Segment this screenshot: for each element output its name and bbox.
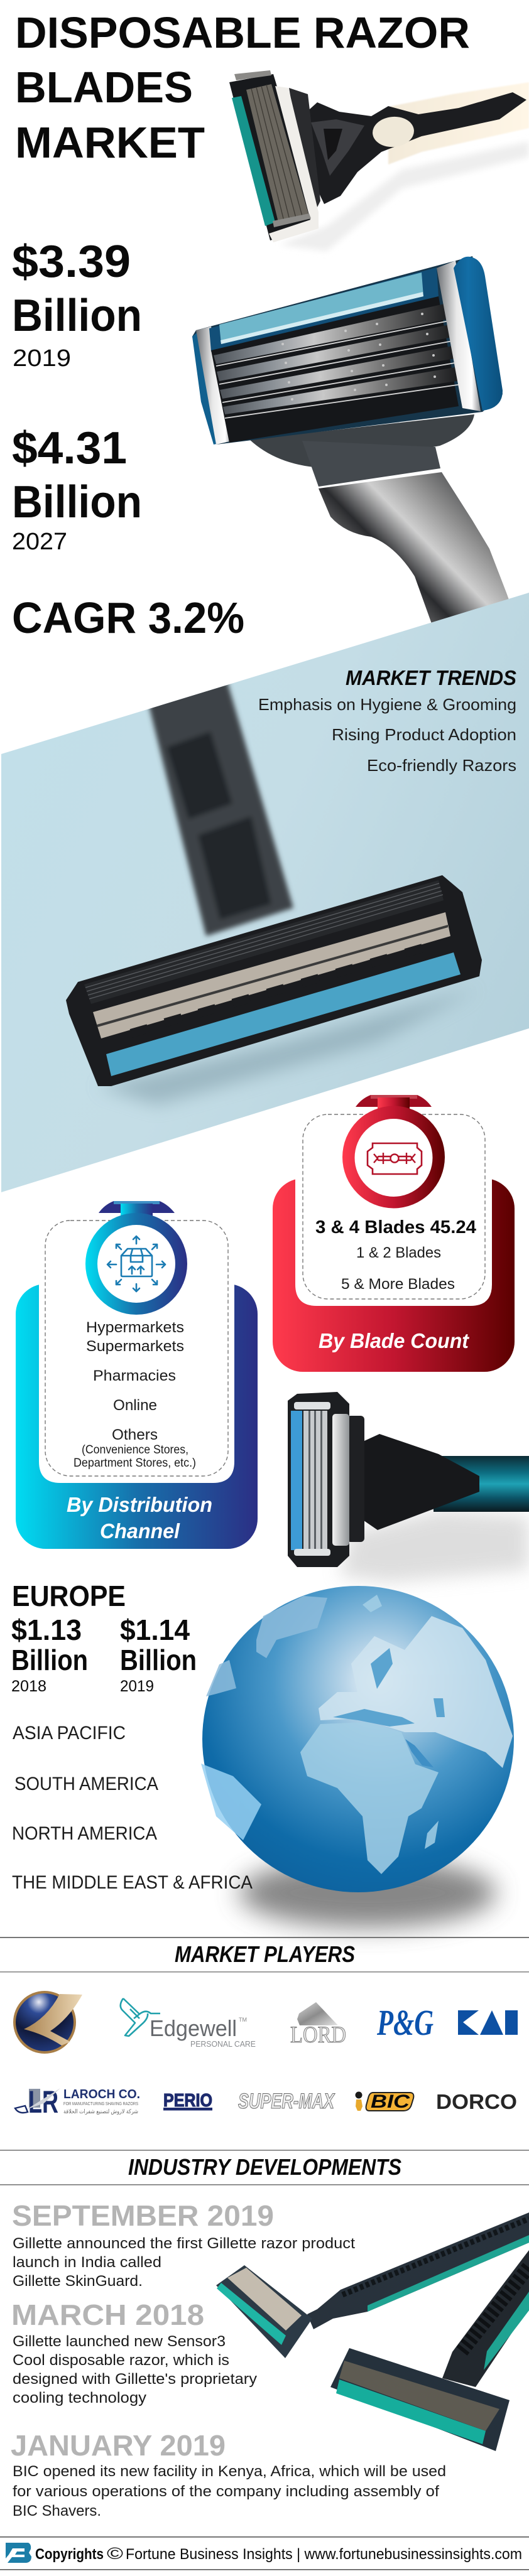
development: March 2018: Gillette launched new Sensor3	[13, 2333, 226, 2350]
development: September 2019: Gillette announced the first Gillette razor product	[13, 2235, 355, 2252]
trend list: Rising Product Adoption	[332, 725, 516, 744]
distribution channel list: Supermarkets	[86, 1338, 184, 1355]
footer	[0, 2536, 529, 2570]
region: Europe stats: 2019	[120, 1678, 154, 1695]
development: March 2018: cooling technology	[13, 2390, 146, 2406]
stat: 2019 market size: 2019	[13, 345, 71, 372]
region: Europe stats: $1.14	[120, 1614, 190, 1646]
development: March 2018	[11, 2298, 257, 2406]
photo: two disposable razors	[216, 2212, 529, 2451]
logo: BIC	[356, 2091, 413, 2112]
region list	[12, 1723, 253, 1893]
logo: Laroch Co.: FOR MANUFACTURING SHAVING RAZORS	[63, 2102, 138, 2106]
illustration: large blue razor	[192, 256, 521, 634]
panel: by distribution channel	[16, 1201, 258, 1549]
icon: Fortune Business Insights logo	[6, 2543, 31, 2563]
distribution channel list: Others	[112, 1426, 158, 1443]
development: September 2019: launch in India called	[13, 2254, 161, 2271]
stat: CAGR: CAGR 3.2%	[12, 593, 244, 642]
distribution channel label: By Distribution	[67, 1493, 212, 1516]
distribution channel list: Pharmacies	[93, 1367, 176, 1384]
title: DISPOSABLE RAZOR	[15, 8, 470, 57]
razor cartridge	[66, 875, 482, 1086]
seas over the land	[333, 1648, 445, 1767]
upper razor	[216, 2212, 529, 2358]
development: January 2019: BIC Shavers.	[13, 2503, 101, 2519]
development: September 2019: Gillette SkinGuard.	[13, 2273, 143, 2290]
footer: Copyrights	[35, 2546, 104, 2563]
logo: Laroch Co.: LAROCH CO.	[63, 2088, 140, 2101]
region: Europe stats: Billion	[120, 1644, 197, 1676]
development: January 2019: for various operations of the company including assembly of	[13, 2483, 439, 2500]
panel: by blade count	[273, 1095, 515, 1372]
logo: KAI	[458, 2010, 518, 2035]
logo: P&G: P&G	[376, 2002, 434, 2043]
development: March 2018: MARCH 2018	[11, 2298, 204, 2331]
trend list	[258, 695, 516, 775]
region: Europe stats	[11, 1580, 197, 1695]
logo: Edgewell: Edgewell	[150, 2015, 237, 2041]
region list: NORTH AMERICA	[12, 1823, 157, 1844]
distribution channel label: Channel	[100, 1519, 180, 1543]
logo: Dorco: DORCO	[436, 2090, 517, 2113]
blade count list: 5 & More Blades	[341, 1276, 455, 1293]
blade count label: By Blade Count	[319, 1329, 470, 1352]
region: Europe stats: 2018	[11, 1678, 46, 1695]
logo: Edgewell: TM	[239, 2017, 247, 2023]
logo: Super-Max: SUPER-MAX	[238, 2089, 335, 2113]
distribution channel list	[74, 1319, 196, 1470]
title: MARKET	[15, 118, 205, 167]
title	[15, 8, 470, 167]
icon: razor blade badge	[342, 1095, 445, 1208]
region: Europe stats: EUROPE	[12, 1580, 126, 1612]
region: Europe stats: Billion	[11, 1644, 88, 1676]
development: January 2019: JANUARY 2019	[11, 2429, 226, 2462]
stat: 2019 market size	[12, 237, 142, 372]
distribution channel list: (Convenience Stores,	[82, 1443, 188, 1457]
logo: Perio: PERIO	[163, 2091, 212, 2111]
logo: BIC: BIC	[371, 2091, 411, 2112]
panel: market trends photo	[1, 593, 529, 1192]
stat: 2019 market size: Billion	[12, 291, 142, 341]
heading: market players: MARKET PLAYERS	[175, 1941, 355, 1967]
logo: Lord: LORD	[290, 2022, 346, 2048]
lower razor	[330, 2250, 529, 2451]
stat: 2027 market size: $4.31	[12, 423, 127, 473]
footer: Fortune Business Insights | www.fortunebusinessinsights.com	[126, 2546, 522, 2563]
blade count list: 1 & 2 Blades	[356, 1244, 441, 1261]
development: January 2019: BIC opened its new facility in Kenya, Africa, which will be used	[13, 2463, 446, 2480]
blurred razor handle	[148, 678, 293, 936]
development: September 2019: SEPTEMBER 2019	[12, 2199, 274, 2232]
trend list: Emphasis on Hygiene & Grooming	[258, 695, 516, 714]
region list: ASIA PACIFIC	[13, 1723, 126, 1743]
logo: Laroch Co.: شركة لاروش لتصنيع شفرات الحلاقة	[63, 2108, 138, 2115]
region list: SOUTH AMERICA	[14, 1774, 158, 1794]
development: March 2018: Cool disposable razor, which is	[13, 2352, 229, 2369]
market trends heading: MARKET TRENDS	[346, 666, 516, 689]
region: Europe stats: $1.13	[11, 1614, 82, 1646]
logo: Laroch Co.: LR	[28, 2084, 58, 2120]
stat: 2019 market size: $3.39	[12, 237, 131, 287]
illustration: globe	[201, 1586, 514, 1927]
title: BLADES	[15, 63, 193, 112]
logo: Edgewell	[121, 1998, 256, 2049]
illustration: teal handled razor	[288, 1392, 529, 1582]
footer: ©	[107, 2544, 123, 2563]
logo: K emblem	[13, 1991, 82, 2054]
cartridge shadow	[98, 989, 477, 1105]
blade count list	[315, 1217, 476, 1293]
development: March 2018: designed with Gillette's proprietary	[13, 2371, 257, 2388]
stat: 2027 market size: 2027	[12, 529, 67, 555]
stat: 2027 market size: Billion	[12, 477, 142, 527]
distribution channel list: Department Stores, etc.)	[74, 1457, 196, 1470]
region list: THE MIDDLE EAST & AFRICA	[12, 1872, 253, 1893]
logo: Edgewell: PERSONAL CARE	[190, 2039, 256, 2049]
stat: 2027 market size	[12, 423, 142, 555]
logo: Laroch Co.	[15, 2084, 140, 2120]
distribution channel list: Hypermarkets	[86, 1319, 184, 1336]
distribution channel label	[67, 1493, 212, 1543]
blade count list: 3 & 4 Blades 45.24	[315, 1217, 476, 1237]
photo: razor with cream handle	[229, 70, 529, 251]
distribution channel list: Online	[113, 1397, 157, 1414]
logo: Lord	[290, 2002, 346, 2048]
development: January 2019	[11, 2429, 446, 2519]
heading: industry developments: INDUSTRY DEVELOPMENTS	[128, 2154, 401, 2180]
development: September 2019	[12, 2199, 355, 2290]
trend list: Eco-friendly Razors	[367, 756, 516, 775]
icon: distribution box badge	[85, 1201, 187, 1315]
